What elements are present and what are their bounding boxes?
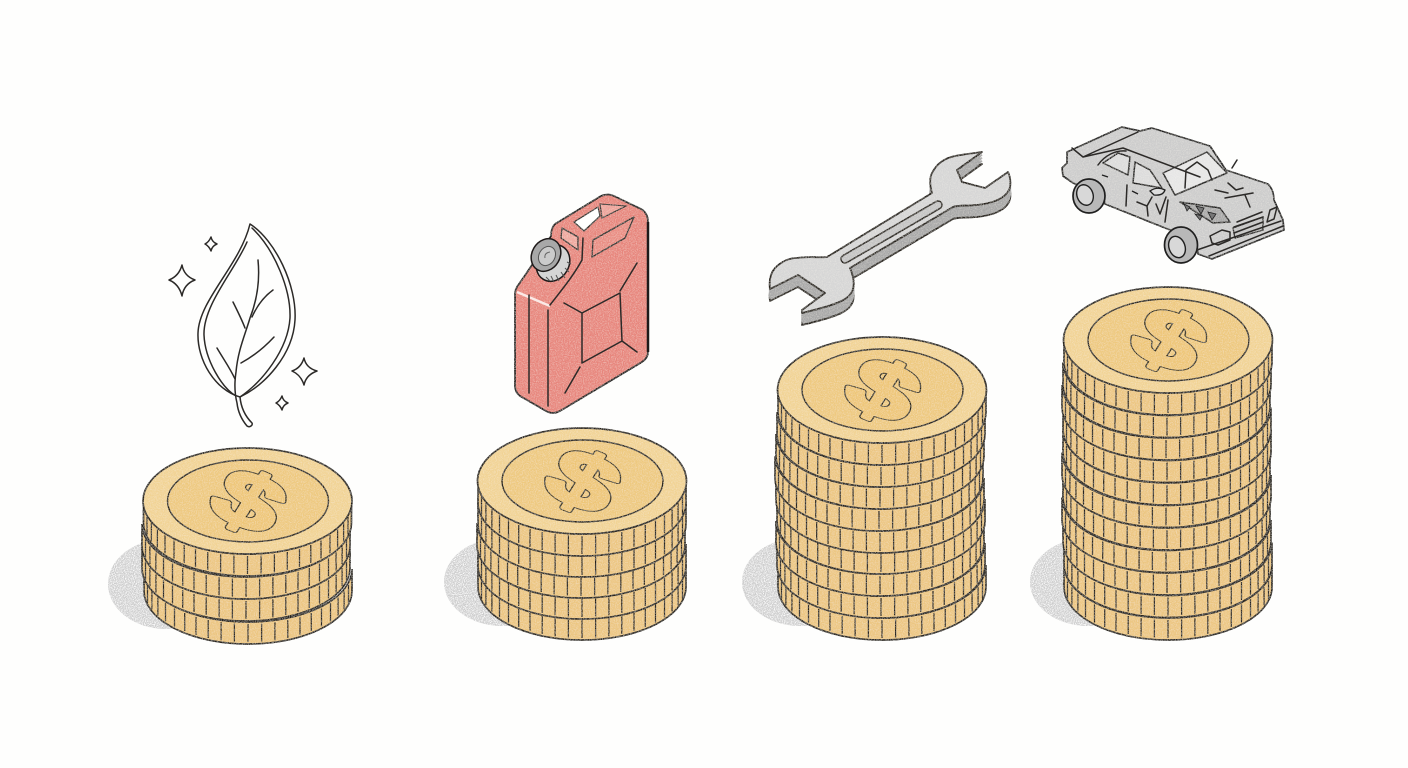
coin stack: eleven coins: $ [1115, 290, 1223, 390]
icon: leaf [169, 224, 317, 427]
coin stack: five coins [477, 428, 686, 640]
coin stack: four coins [142, 448, 352, 644]
shadow: stack 1 [108, 539, 224, 629]
shadow: stack 3 [742, 538, 858, 626]
car mirror and door handles [1102, 175, 1165, 195]
coin stack: four coins: $ [195, 451, 302, 551]
coin stack: five coins: $ [529, 431, 637, 531]
coin stack: nine coins: $ [829, 340, 937, 440]
icon: can cap [525, 233, 576, 287]
panel: stack 3, nine coins with wrench [742, 152, 1010, 640]
panel: stack 1, four coins with leaf [108, 224, 352, 644]
coin stack: eleven coins [1062, 287, 1272, 640]
car wheels [1073, 179, 1198, 263]
coin stack: eleven coins: $ [1115, 290, 1223, 390]
shadow: stack 4 [1030, 538, 1146, 626]
icon: sparkles [169, 237, 317, 410]
car line details and cracks [1072, 132, 1283, 256]
icon: red jerry can [515, 194, 648, 413]
coin stack: nine coins [775, 337, 986, 640]
coin stack: four coins: $ [195, 451, 302, 551]
coin stack: nine coins: $ [829, 340, 937, 440]
icon: wrench [770, 152, 1010, 325]
coin stack: five coins: $ [529, 431, 637, 531]
panel: stack 4, eleven coins with wrecked car [1030, 127, 1284, 640]
icon: damaged car [1062, 127, 1284, 263]
shadow: stack 2 [444, 538, 560, 626]
panel: stack 2, five coins with jerry can [444, 194, 686, 640]
